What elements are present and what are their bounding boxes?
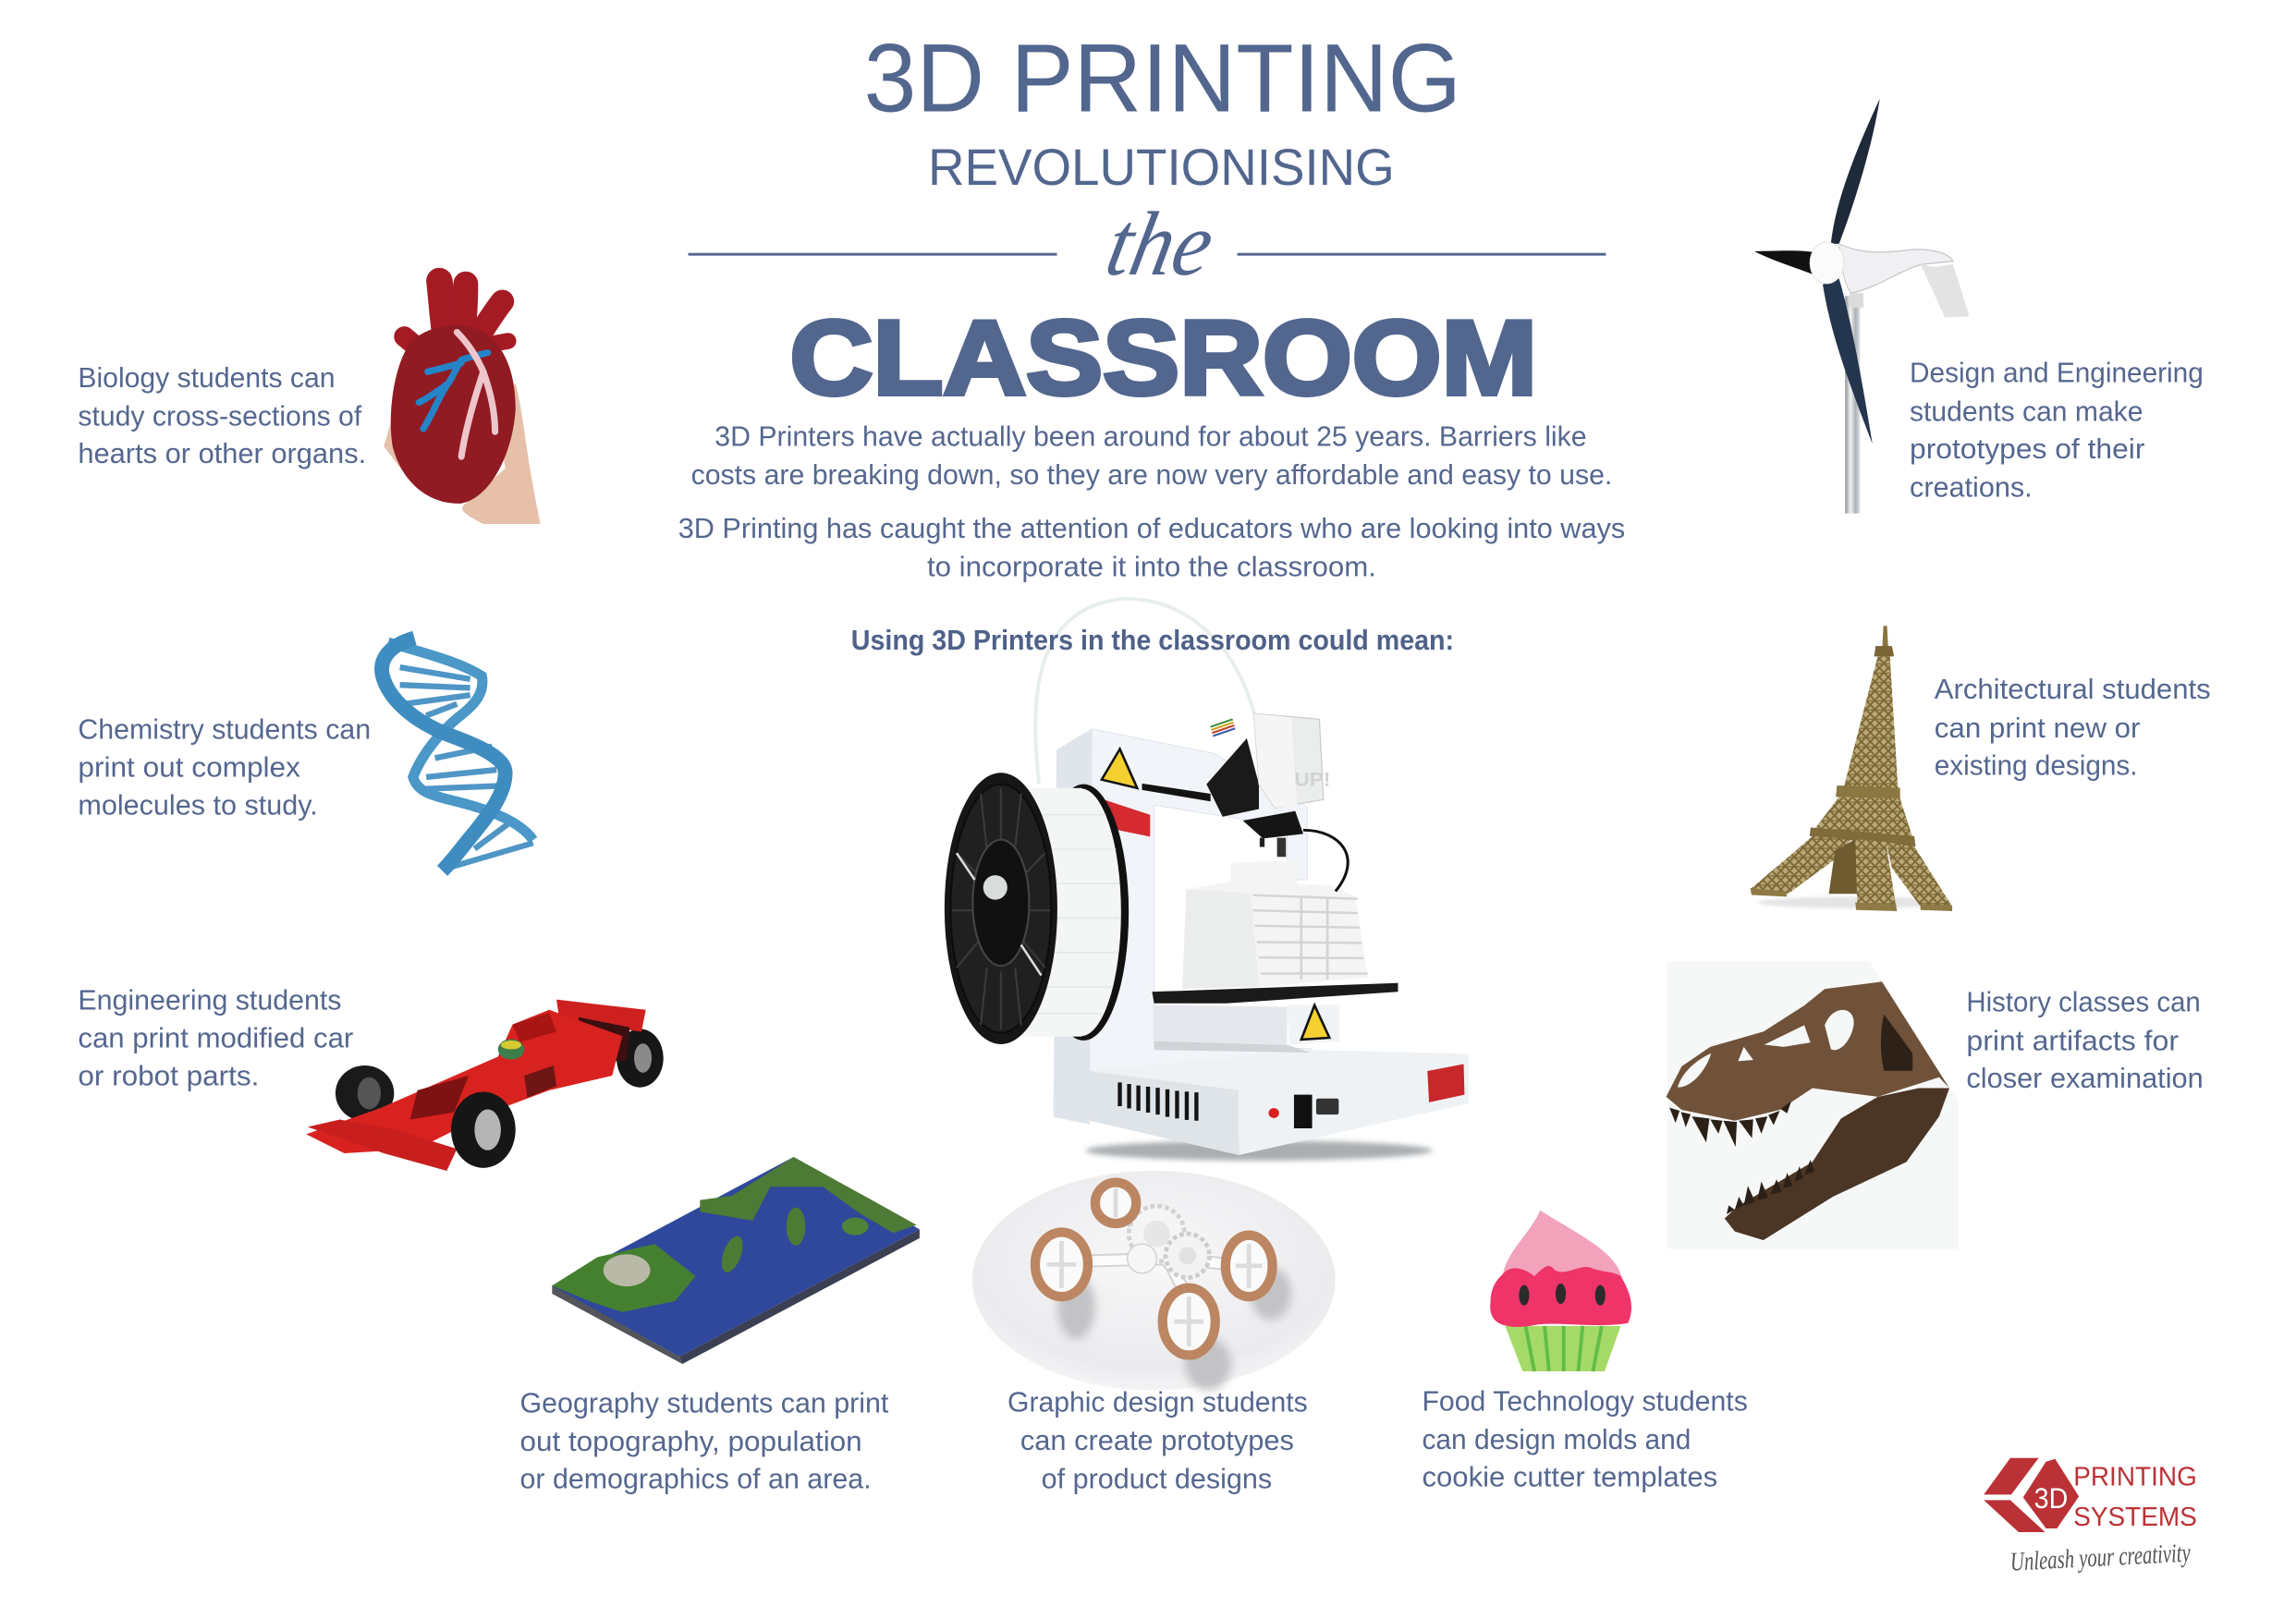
extruder assembly: UP! xyxy=(1294,768,1330,791)
panel: architecture xyxy=(1751,626,2211,911)
text: biology: hearts or other organs. xyxy=(78,437,366,469)
filament spool xyxy=(945,773,1129,1044)
text: design and engineering: Design and Engineering xyxy=(1910,357,2204,389)
logo wordmark: PRINTING xyxy=(2073,1462,2197,1491)
text: architecture: existing designs. xyxy=(1935,749,2138,781)
text: food technology: Food Technology students xyxy=(1422,1384,1748,1417)
text: chemistry: Chemistry students can xyxy=(78,712,371,745)
text: design and engineering xyxy=(1910,357,2204,503)
text: graphic design: of product designs xyxy=(1042,1462,1272,1494)
text: chemistry xyxy=(78,712,371,821)
text: graphic design: can create prototypes xyxy=(1020,1424,1294,1456)
text: history: History classes can xyxy=(1966,986,2201,1018)
text: chemistry: molecules to study. xyxy=(78,788,318,821)
logo mark xyxy=(1984,1458,2079,1532)
heading: 3D PRINTING: 3D PRINTING xyxy=(864,25,1461,133)
text: geography: out topography, population xyxy=(519,1425,862,1457)
icon: Eiffel tower xyxy=(1751,626,1953,911)
arm rail xyxy=(1142,784,1211,801)
icon: wind turbine xyxy=(1754,99,1970,514)
text: geography xyxy=(519,1386,889,1494)
text: graphic design xyxy=(1008,1385,1308,1494)
printer illustration xyxy=(945,599,1469,1161)
text: design and engineering: creations. xyxy=(1910,470,2033,503)
intro text: 3D Printers have actually been around for about 25 years. Barriers like xyxy=(714,420,1587,453)
printer base xyxy=(1090,1050,1469,1155)
printed object xyxy=(1182,860,1368,989)
text: biology xyxy=(78,361,366,469)
icon: heart model in hand xyxy=(384,281,541,524)
bold lead-in line: Using 3D Printers in the classroom could mean: xyxy=(851,624,1454,656)
panel: food technology xyxy=(1422,1211,1748,1492)
icon: DNA helix xyxy=(382,639,533,870)
logo: 3D Printing Systems xyxy=(1984,1458,2197,1577)
text: biology: Biology students can xyxy=(78,361,336,394)
heading: REVOLUTIONISING: REVOLUTIONISING xyxy=(928,139,1395,196)
panel: design and engineering xyxy=(1754,99,2204,514)
panel: chemistry xyxy=(78,639,533,870)
text: architecture: can print new or xyxy=(1935,712,2140,744)
text: chemistry: print out complex xyxy=(78,750,300,783)
text: design and engineering: prototypes of their xyxy=(1910,432,2144,465)
panel: graphic design xyxy=(972,1171,1336,1494)
build plate xyxy=(1152,983,1398,1004)
logo wordmark 2: SYSTEMS xyxy=(2073,1503,2197,1532)
text: history: print artifacts for xyxy=(1966,1024,2179,1056)
text: architecture: Architectural students xyxy=(1935,673,2211,705)
text: history xyxy=(1966,986,2204,1094)
text: graphic design: Graphic design students xyxy=(1008,1385,1308,1418)
printer shadow xyxy=(1085,1140,1433,1161)
intro text: costs are breaking down, so they are now very affordable and easy to use. xyxy=(691,458,1612,491)
icon: terrain map xyxy=(552,1157,920,1364)
text: engineering xyxy=(78,983,353,1091)
heading: the, with flanking rules: the xyxy=(1098,193,1223,295)
heading: CLASSROOM: CLASSROOM xyxy=(789,300,1537,418)
intro text xyxy=(678,420,1625,583)
text: geography: Geography students can print xyxy=(519,1386,889,1418)
text: engineering: or robot parts. xyxy=(78,1059,259,1091)
text: engineering: Engineering students xyxy=(78,983,341,1016)
warning label and red label xyxy=(1102,749,1150,836)
text: food technology xyxy=(1422,1384,1748,1492)
text: geography: or demographics of an area. xyxy=(519,1462,872,1494)
tagline: Unleash your creativity xyxy=(2009,1538,2192,1577)
bed carriage xyxy=(1154,1004,1339,1053)
text: food technology: can design molds and xyxy=(1422,1423,1691,1455)
text: biology: study cross-sections of xyxy=(78,399,362,432)
panel: geography xyxy=(519,1157,920,1494)
title block xyxy=(689,25,1606,418)
panel: history xyxy=(1667,961,2204,1248)
intro text: to incorporate it into the classroom. xyxy=(927,551,1376,583)
icon: watermelon cupcake xyxy=(1490,1211,1631,1371)
filament tube xyxy=(1035,599,1255,785)
text: engineering: can print modified car xyxy=(78,1021,353,1053)
text: architecture xyxy=(1935,673,2211,781)
extruder assembly xyxy=(1206,713,1348,891)
icon: F1 car xyxy=(306,1000,664,1171)
intro text: 3D Printing has caught the attention of educators who are looking into ways xyxy=(678,512,1625,544)
icon: 3D printed gear car xyxy=(972,1171,1336,1391)
printer frame xyxy=(1054,729,1312,1125)
text: history: closer examination xyxy=(1966,1062,2204,1094)
panel: engineering xyxy=(78,983,664,1171)
text: design and engineering: students can make xyxy=(1910,395,2143,427)
logo 3D: 3D xyxy=(2034,1481,2068,1515)
icon: T. rex skull xyxy=(1667,961,1959,1248)
panel: biology xyxy=(78,281,541,524)
text: food technology: cookie cutter templates xyxy=(1422,1460,1717,1492)
